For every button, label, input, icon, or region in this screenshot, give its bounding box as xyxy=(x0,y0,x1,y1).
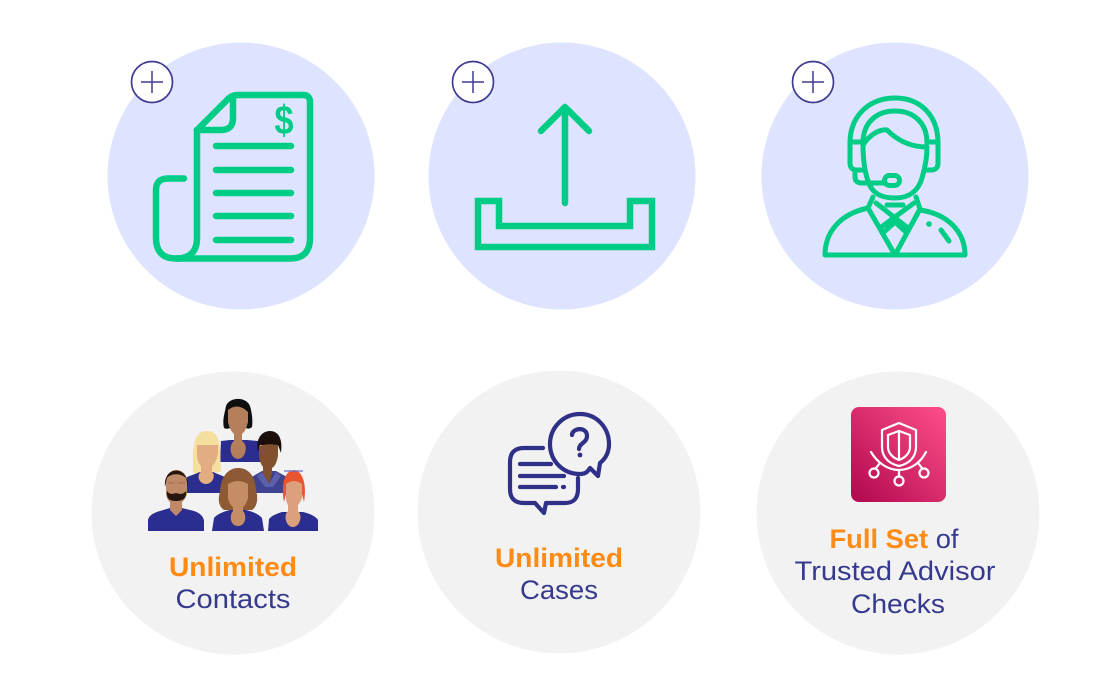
person: red hair woman xyxy=(268,470,318,531)
label: full set of trusted advisor checks xyxy=(794,524,996,619)
panel: trusted advisor checks xyxy=(756,372,1040,654)
person: curly hair woman xyxy=(212,468,264,531)
circle background: trusted advisor xyxy=(756,372,1040,654)
icon: chat bubbles with question mark xyxy=(510,414,609,513)
panel: unlimited contacts xyxy=(92,372,374,654)
icon: upload tray and arrow xyxy=(478,107,652,247)
panel: billing xyxy=(108,42,374,310)
circle background: contacts xyxy=(92,372,374,654)
icon: plus button xyxy=(452,62,494,102)
label: full set of trusted advisor checks: Trusted Advisor xyxy=(794,556,996,586)
icon: headset agent xyxy=(825,98,965,255)
circle background: support agent xyxy=(762,42,1028,310)
icon: group of people xyxy=(148,399,318,531)
label: unlimited contacts: Unlimited xyxy=(169,552,297,582)
circle background: upload xyxy=(428,42,696,310)
label: full set of trusted advisor checks: Checks xyxy=(851,589,945,619)
label: unlimited contacts: Contacts xyxy=(176,584,290,614)
person: dark man xyxy=(250,431,287,493)
circle background: cases xyxy=(418,370,700,654)
icon: plus button xyxy=(132,62,172,102)
person: top woman xyxy=(220,399,262,462)
person: bearded man xyxy=(148,470,204,531)
panel: upload xyxy=(428,42,696,310)
icon: plus button xyxy=(792,62,834,102)
icon: shield badge xyxy=(851,407,946,502)
icon: invoice document: $ xyxy=(274,97,294,143)
panel: unlimited cases xyxy=(418,370,700,654)
label: unlimited cases: Cases xyxy=(520,575,598,605)
label: unlimited cases: Unlimited xyxy=(495,543,623,573)
panel: support agent xyxy=(762,42,1028,310)
label: unlimited cases xyxy=(495,543,623,605)
circle background: billing xyxy=(108,42,374,310)
label: full set of trusted advisor checks: Full Set of xyxy=(830,524,959,554)
person: blonde woman xyxy=(185,431,225,493)
icon: invoice document xyxy=(156,95,310,258)
label: unlimited contacts xyxy=(169,552,297,614)
